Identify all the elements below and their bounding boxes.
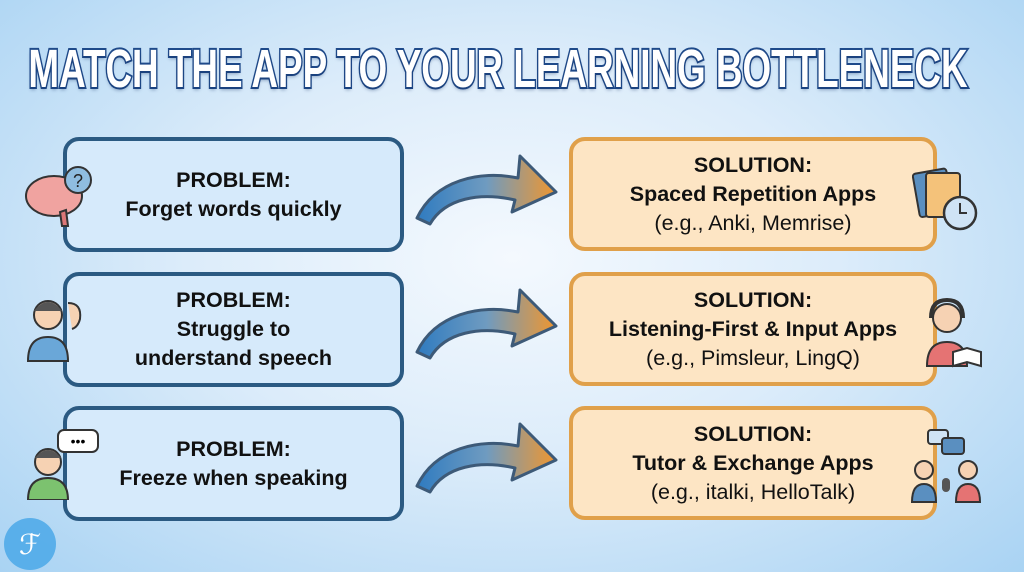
panel: solution 3	[569, 406, 937, 520]
icon: brain with question	[25, 166, 92, 227]
logo: ℱ	[19, 530, 41, 561]
title: MATCH THE APP TO YOUR LEARNING BOTTLENECK	[28, 39, 968, 99]
icon: person with speech bubble	[27, 429, 99, 500]
panel: problem 2	[63, 272, 404, 387]
icon: cards and clock	[912, 168, 978, 230]
arrow 3	[416, 422, 558, 494]
panel: solution 2: SOLUTION:	[694, 288, 812, 312]
panel: solution 2: (e.g., Pimsleur, LingQ)	[646, 346, 860, 370]
panel: problem 1: Forget words quickly	[125, 196, 342, 220]
panel: solution 2: Listening-First & Input Apps	[609, 316, 897, 340]
arrow 2	[416, 288, 558, 360]
arrow 1	[415, 154, 558, 226]
panel: solution 1: SOLUTION:	[694, 152, 812, 176]
panel: solution 1: Spaced Repetition Apps	[630, 182, 876, 206]
panel: problem 3: PROBLEM:	[176, 436, 291, 460]
icon: person with ear	[27, 300, 82, 362]
panel: problem 2: Struggle to	[177, 317, 290, 341]
panel: problem 3: Freeze when speaking	[119, 466, 348, 490]
panel: solution 3: (e.g., italki, HelloTalk)	[651, 480, 855, 504]
panel: problem 3	[63, 406, 404, 521]
panel: problem 2: PROBLEM:	[176, 288, 291, 312]
panel: solution 1	[569, 137, 937, 251]
icon: two people talking	[911, 429, 981, 503]
panel: problem 1: PROBLEM:	[176, 168, 291, 192]
icon: headset with book	[926, 298, 982, 368]
panel: solution 2	[569, 272, 937, 386]
panel: solution 1: (e.g., Anki, Memrise)	[654, 210, 852, 234]
logo	[4, 518, 56, 570]
icon: brain with question: ?	[73, 171, 83, 191]
panel: solution 3: SOLUTION:	[694, 422, 812, 446]
panel: problem 1	[63, 137, 404, 252]
panel: problem 2: understand speech	[135, 346, 332, 370]
panel: solution 3: Tutor & Exchange Apps	[632, 450, 874, 474]
icon: person with speech bubble: •••	[71, 433, 85, 449]
